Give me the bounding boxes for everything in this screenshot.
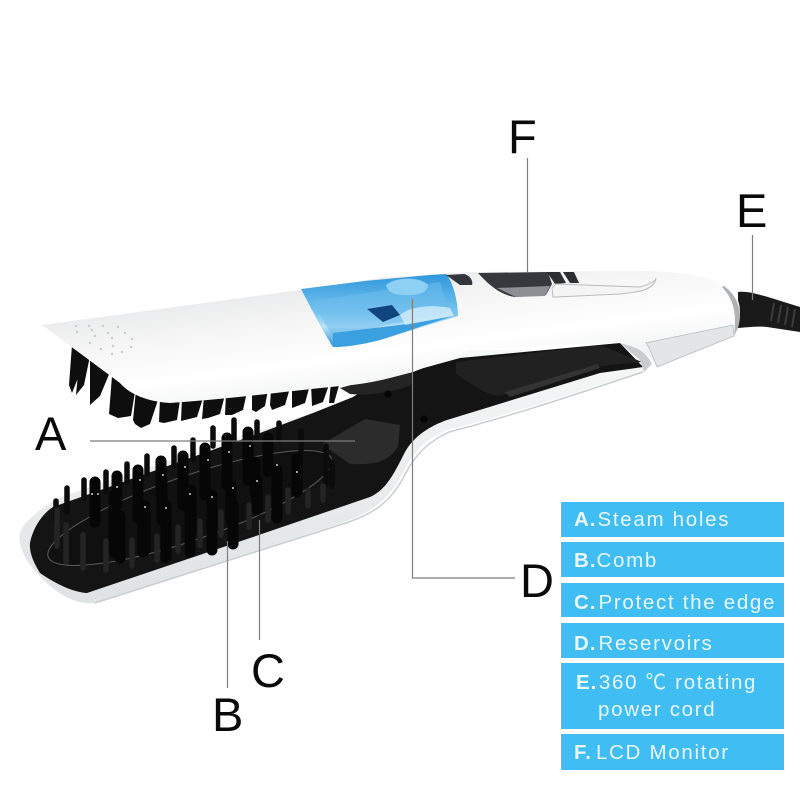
LCD display [478, 272, 552, 297]
steam hole recess [322, 419, 400, 464]
thin back bristles [56, 420, 332, 520]
legend: rotating power cord [561, 663, 784, 729]
legend: LCD monitor [561, 734, 784, 770]
steam vent dots [75, 325, 133, 355]
label C: C [251, 644, 285, 697]
reservoir inner dark valve [367, 305, 400, 322]
chrome cord collar [722, 286, 740, 336]
label E: E [736, 184, 767, 237]
thick bristles [95, 432, 297, 558]
legend: comb: B.Comb [574, 549, 658, 572]
callout lines [90, 158, 752, 688]
label F: F [508, 110, 537, 163]
legend: rotating power cord: power cord [598, 698, 716, 721]
legend: reservoirs [561, 623, 784, 658]
power cord [738, 292, 800, 332]
lower arm with comb plate [19, 343, 652, 603]
upper arm white shell [42, 271, 740, 403]
legend: steam holes: A.Steam holes [574, 508, 730, 531]
label A: A [35, 407, 67, 460]
screw holes [384, 390, 392, 398]
upper comb bristles [69, 345, 340, 428]
hinge lump under body [340, 368, 413, 395]
legend panel [561, 502, 784, 770]
shell outer shadow line [95, 372, 643, 603]
rear pad [456, 345, 642, 396]
legend: rotating power cord: E.360 ℃ rotating [576, 671, 757, 694]
comb base oval [38, 429, 342, 587]
reservoir cap [386, 279, 428, 295]
legend: protect the edge [561, 583, 784, 617]
bristle highlights [91, 445, 298, 509]
legend: protect the edge: C.Protect the edge [574, 591, 776, 614]
label B: B [212, 688, 243, 741]
silver rear trim [646, 325, 734, 367]
hinge chrome [620, 343, 652, 372]
control buttons [547, 272, 566, 284]
lower arm white shell [19, 350, 648, 603]
label D: D [520, 554, 554, 607]
legend: LCD monitor: F.LCD Monitor [574, 741, 730, 764]
lower comb bristles [56, 420, 332, 570]
centre rivet [230, 532, 238, 538]
lower arm black plate [30, 343, 643, 593]
reservoir window [301, 274, 458, 347]
silver panel [552, 278, 656, 297]
reservoir glare [400, 306, 454, 325]
legend: reservoirs: D.Reservoirs [574, 632, 713, 655]
upper arm body [42, 271, 740, 403]
legend: comb [561, 542, 784, 577]
thin front bristles [57, 486, 323, 570]
legend: steam holes [561, 502, 784, 537]
power button [446, 274, 472, 285]
